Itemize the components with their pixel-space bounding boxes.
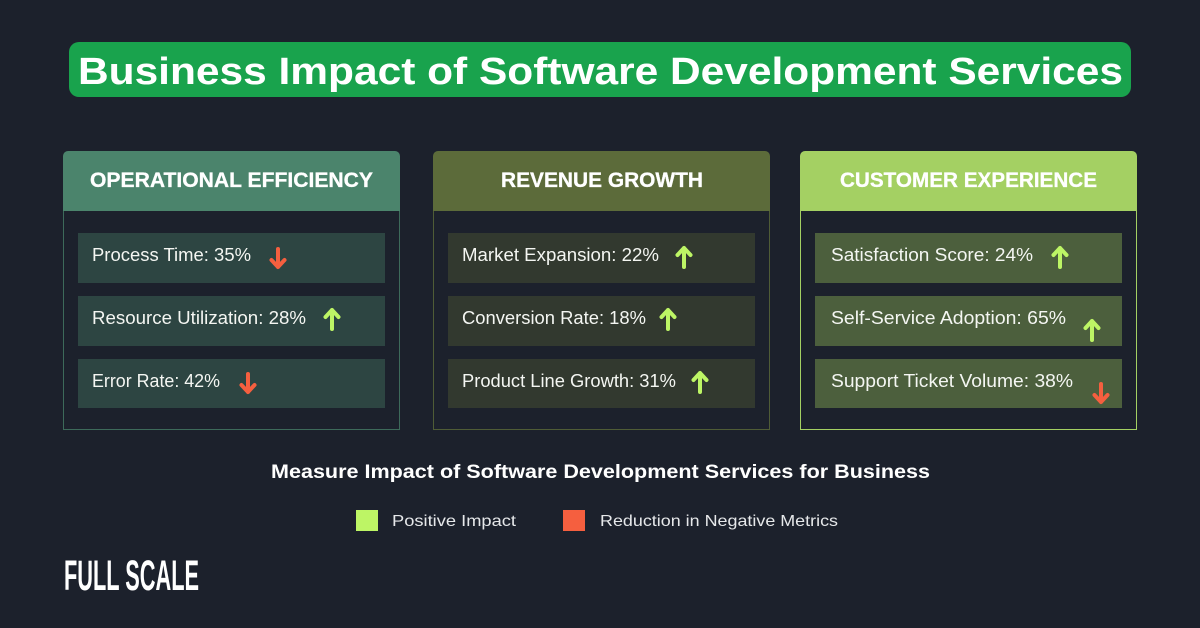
panel header: revenue growth: REVENUE GROWTH: [501, 169, 703, 192]
metric: resource utilization: Resource Utilization: 28%: [92, 308, 306, 328]
metric: conversion rate: [448, 296, 755, 346]
metric: resource utilization: [78, 296, 385, 346]
panel header: customer experience: [800, 151, 1137, 211]
legend item: reduction in negative metrics: Reduction in Negative Metrics: [600, 513, 838, 530]
logo: full scale: FULL SCALE: [64, 552, 199, 600]
panel header: customer experience: CUSTOMER EXPERIENCE: [840, 169, 1097, 192]
title: [69, 42, 1131, 97]
panel: customer experience: [800, 151, 1137, 430]
metric: support ticket volume: [815, 359, 1122, 408]
panel header: operational efficiency: [63, 151, 400, 211]
panel header: operational efficiency: OPERATIONAL EFFICIENCY: [90, 169, 373, 192]
legend item: reduction in negative metrics: [563, 510, 838, 531]
metric: process time: [78, 233, 385, 283]
metric: market expansion: Market Expansion: 22%: [462, 245, 659, 265]
metric: self-service adoption: [815, 296, 1122, 346]
metric: error rate: [78, 359, 385, 408]
metric: satisfaction score: Satisfaction Score: 24%: [831, 245, 1033, 265]
metric: product line growth: Product Line Growth: 31%: [462, 371, 676, 391]
metric: product line growth: [448, 359, 755, 408]
metric: market expansion: [448, 233, 755, 283]
legend item: positive impact: [356, 510, 517, 531]
panel header: revenue growth: [433, 151, 770, 211]
legend: [356, 510, 838, 531]
metric: self-service adoption: Self-Service Adoption: 65%: [831, 308, 1066, 328]
chart subtitle: Measure Impact of Software Development Services for Business: [271, 461, 930, 483]
metric: support ticket volume: Support Ticket Volume: 38%: [831, 371, 1073, 391]
metric: satisfaction score: [815, 233, 1122, 283]
panel: revenue growth: [433, 151, 770, 430]
metric: process time: Process Time: 35%: [92, 245, 251, 265]
title: Business Impact of Software Development Services: [78, 51, 1123, 93]
panel: operational efficiency: [63, 151, 400, 430]
metric: error rate: Error Rate: 42%: [92, 371, 220, 391]
legend item: positive impact: Positive Impact: [392, 513, 517, 530]
metric: conversion rate: Conversion Rate: 18%: [462, 308, 646, 328]
